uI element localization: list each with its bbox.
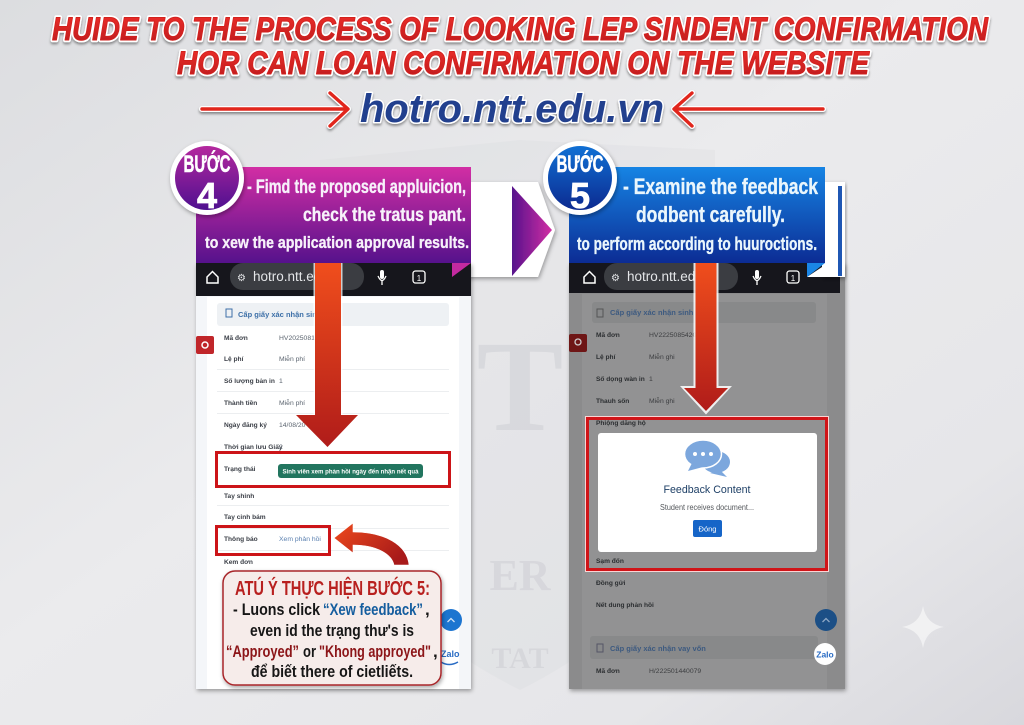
browser bar: hotro.ntt.edu (627, 269, 703, 284)
modal message: Student receives document... (660, 503, 754, 512)
title: HOR CAN LOAN CONFIRMATION ON THE WEBSITE (177, 45, 870, 81)
zalo button (441, 649, 460, 664)
card (207, 297, 459, 689)
dimmed rows: Lệ phí (596, 354, 617, 361)
application rows: Lệ phí (224, 356, 245, 363)
callout body: or (303, 642, 316, 661)
application rows: Kem đơn (224, 559, 253, 566)
browser bar: ⚙ (611, 273, 620, 284)
callout body: - Luons click (233, 600, 320, 619)
title: HOR CAN LOAN CONFIRMATION ON THE WEBSITE (177, 45, 870, 81)
badge: step 5 (543, 141, 617, 216)
highlight: notification row (216, 526, 330, 554)
dimmed card: Cấp giấy xác nhận sinh v (610, 308, 700, 317)
browser bar: 1 (417, 274, 422, 283)
application rows: Miễn phí (279, 398, 305, 407)
highlight: modal (586, 416, 828, 572)
callout body: “Xew feedback” (323, 600, 423, 619)
application rows: Thông báo (224, 536, 258, 543)
panel: step 5 phone screenshot (569, 263, 845, 689)
callout body: “Approyed” (226, 642, 299, 661)
panel: step 4 banner (196, 167, 471, 277)
step 4 text: - Fimd the proposed appluicion, (247, 177, 466, 198)
website url with arrows (202, 87, 823, 131)
arrow: down to modal (680, 263, 732, 414)
callout body: , (425, 600, 430, 619)
step 5 text: to perform according to huuroctions. (577, 234, 817, 254)
connector arrow between steps (452, 182, 555, 277)
callout heading: ATÚ Ý THỰC HIỆN BƯỚC 5: (235, 576, 430, 600)
dimmed rows (596, 332, 696, 609)
application rows: Tay cinh bám (224, 514, 266, 521)
application rows: Xem phản hồi (279, 534, 321, 543)
callout body: , (433, 642, 438, 661)
card: Cấp giấy xác nhận sin (238, 310, 317, 319)
modal close button (693, 520, 722, 537)
icon: chat bubbles (684, 440, 730, 477)
watermark crest: ER (489, 551, 552, 600)
application rows: Ngày đăng ký (224, 422, 267, 429)
badge: step 4: BƯỚC (184, 150, 230, 178)
scroll top button dimmed (815, 609, 837, 631)
browser bar: ⚙ (237, 273, 246, 284)
feedback modal: Đóng (699, 524, 716, 534)
callout body: để biết there of cietliếts. (251, 662, 413, 681)
dimmed card (582, 294, 827, 689)
badge: step 4 (170, 141, 244, 216)
application rows: Trạng thái (224, 466, 256, 473)
panel: step 5 banner (569, 167, 845, 277)
callout: note for step 5 (223, 571, 441, 685)
browser bar: hotro.ntt.edu (253, 269, 329, 284)
application rows: Thời gian lưu Giấy (224, 443, 283, 451)
dimmed rows: Miễn ghi (649, 352, 675, 361)
dimmed rows: Thauh sốn (596, 397, 629, 405)
panel: step 4 phone screenshot (196, 263, 471, 689)
highlight: status row (216, 452, 450, 486)
dimmed rows: Mã đơn (596, 332, 620, 339)
arrow: right (674, 93, 823, 126)
watermark crest (320, 140, 715, 690)
callout body: even id the trạng thư's is (250, 621, 414, 640)
step 4 text: check the tratus pant. (303, 205, 466, 226)
dimmed rows: Số dọng wàn in (596, 375, 645, 383)
badge: step 5: 5 (570, 175, 590, 216)
second dimmed card: Cấp giấy xác nhận vay vốn (610, 644, 706, 653)
application rows: HV2025081 (279, 335, 315, 342)
status badge: Sinh viên xem phản hồi ngày đến nhận nết quả (282, 466, 419, 476)
arrow: curved to notification (334, 523, 409, 565)
step 4 text: to xew the application approval results. (205, 233, 469, 252)
dimmed rows: Miễn ghi (649, 396, 675, 405)
icon: side button (196, 336, 214, 354)
dimmed rows: Nết dung phản hồi (596, 600, 654, 609)
application rows (217, 335, 449, 566)
dimmed rows: 1 (649, 376, 653, 383)
dimmed rows: Đồng gửi (596, 578, 625, 587)
feedback modal (598, 433, 817, 552)
application rows: 14/08/20 (279, 422, 306, 429)
browser bar (569, 263, 840, 293)
url text: hotro.ntt.edu.vn (360, 87, 664, 131)
application rows: Tay shinh (224, 493, 254, 500)
dimmed rows: Sạm đốn (596, 557, 624, 565)
arrow: left (202, 93, 348, 126)
badge: step 4: 4 (197, 175, 217, 216)
status badge (278, 464, 423, 478)
application rows: Mã đơn (224, 335, 248, 342)
scroll top button (440, 609, 462, 631)
application rows: Thành tiền (224, 398, 257, 407)
fold (452, 263, 471, 277)
application rows: Miễn phí (279, 354, 305, 363)
step 5 text (577, 174, 819, 254)
step 5 text: dodbent carefully. (636, 202, 785, 227)
second dimmed card: Mã đơn (596, 668, 620, 675)
browser bar: 1 (791, 274, 796, 283)
title (52, 11, 989, 81)
icon: sparkle (902, 606, 944, 648)
second dimmed card: H/222501440079 (649, 668, 701, 675)
application rows: Số lượng bản in (224, 377, 275, 385)
watermark crest: TAT (491, 642, 549, 675)
dimmed rows: HV2225085420 (649, 332, 696, 339)
icon: side button dimmed (569, 334, 587, 352)
callout body: "Khong approyed" (319, 642, 431, 661)
zalo button: Zalo (441, 649, 460, 659)
zalo button white (814, 643, 836, 665)
dimmed rows: Phiộng dăng hộ (596, 420, 646, 427)
modal heading: Feedback Content (664, 484, 750, 496)
badge: step 5: BƯỚC (556, 150, 604, 178)
step 4 text (205, 177, 469, 252)
application rows: 1 (279, 378, 283, 385)
browser bar (196, 263, 471, 296)
step 5 text: - Examine the feedback (623, 174, 819, 199)
callout body (226, 600, 438, 681)
arrow: down to status (296, 263, 358, 447)
zalo button white: Zalo (816, 650, 834, 660)
application rows: 2 (279, 444, 283, 451)
watermark crest: T (477, 315, 563, 459)
second dimmed card (590, 636, 818, 675)
